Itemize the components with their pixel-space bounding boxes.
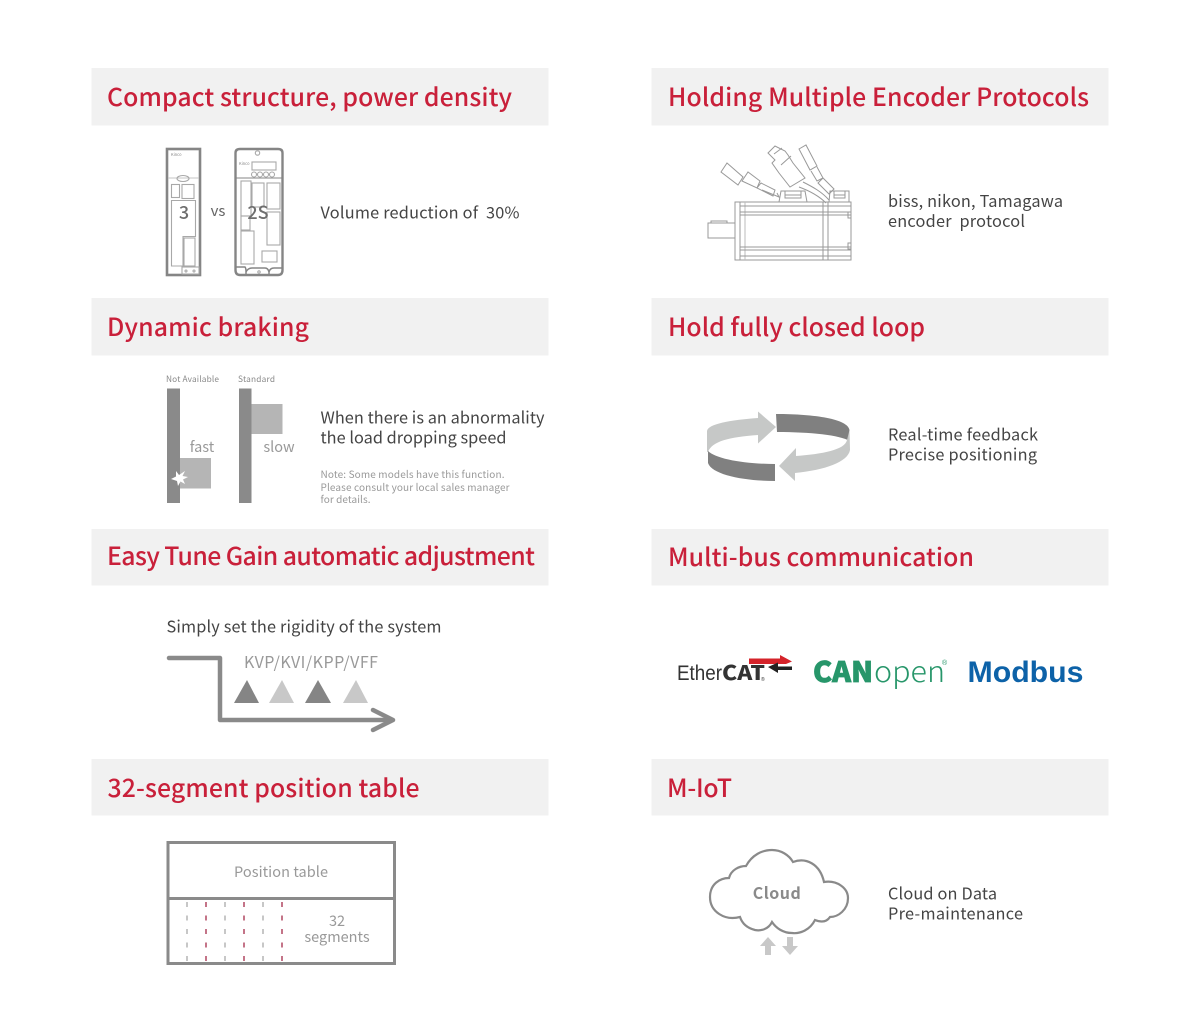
text: note: for details.	[320, 491, 371, 506]
diagram: standard slow	[238, 373, 295, 503]
text: volume reduction: Volume reduction of 30%	[320, 200, 520, 224]
text: abnormality: the load dropping speed	[320, 424, 506, 448]
logo: EtherCAT: Ether	[677, 662, 722, 685]
label: gain parameters: KVP/KVI/KPP/VFF	[244, 649, 378, 673]
heading: M-IoT: M-IoT	[667, 769, 732, 805]
text: note: Please consult your local sales manager	[320, 479, 510, 494]
label: vs: vs	[211, 200, 225, 221]
diagram: standard slow: slow	[263, 436, 295, 457]
logo: CANopen: ®	[942, 659, 948, 667]
heading: fully closed loop	[652, 298, 1108, 356]
heading: multi-bus: Multi-bus communication	[668, 538, 974, 574]
panel: compact structure	[92, 68, 548, 275]
text: feedback: Precise positioning	[888, 442, 1037, 466]
diagram: position table: segments	[304, 926, 370, 947]
logo: EtherCAT: ®	[761, 676, 765, 683]
diagram: position table: Position table	[234, 861, 328, 882]
icon: cloud: Cloud	[753, 880, 801, 904]
heading: dynamic braking: Dynamic braking	[107, 308, 309, 344]
panel: M-IoT	[652, 759, 1108, 955]
text: cloud on data: Pre-maintenance	[888, 900, 1023, 924]
icon: model 3 drive	[167, 149, 200, 275]
text: abnormality: When there is an abnormality	[320, 404, 545, 428]
logo: EtherCAT: CAT	[722, 657, 765, 686]
heading: easy tune: Easy Tune Gain automatic adjustment	[107, 537, 535, 573]
text: rigidity: Simply set the rigidity of the system	[166, 614, 442, 638]
diagram: not available fast: Not Available	[166, 373, 219, 385]
text: note: Note: Some models have this function.	[320, 466, 505, 481]
logo: CANopen: open	[874, 649, 945, 691]
panel: encoder protocols	[652, 68, 1108, 260]
icon: cloud	[710, 850, 848, 933]
icon: model 2S drive: Kinco	[239, 161, 250, 167]
logo: CANopen: CAN	[813, 651, 873, 691]
panel: easy tune	[92, 529, 548, 730]
heading: encoder protocols	[652, 68, 1108, 126]
heading: compact structure: Compact structure, power density	[107, 78, 512, 114]
heading: fully closed loop: Hold fully closed loop	[668, 308, 925, 344]
icon: model 3 drive: 3	[179, 199, 189, 225]
diagram: standard slow: Standard	[238, 373, 275, 385]
logo: CANopen	[813, 649, 948, 691]
heading: M-IoT	[652, 759, 1108, 816]
text: encoder protocol: encoder protocol	[888, 208, 1025, 232]
text: abnormality	[320, 404, 545, 448]
heading: compact structure	[92, 68, 548, 126]
diagram: step arrow	[169, 658, 393, 730]
text: feedback	[888, 422, 1038, 466]
logo: EtherCAT	[677, 655, 792, 686]
text: cloud on data: Cloud on Data	[888, 880, 997, 904]
icon: gain triangles	[234, 680, 368, 703]
icon: model 2S drive	[236, 149, 282, 275]
icon: up and down arrows	[760, 937, 798, 955]
text: encoder protocol: biss, nikon, Tamagawa	[888, 188, 1063, 212]
diagram: not available fast	[166, 373, 219, 503]
panel: position table	[92, 759, 548, 964]
heading: position table	[92, 759, 548, 816]
icon: servo motor	[708, 145, 851, 260]
text: cloud on data	[888, 880, 1023, 924]
text: note	[320, 466, 510, 506]
diagram: position table	[168, 842, 394, 964]
logo: Modbus: Modbus	[968, 656, 1084, 689]
icon: model 2S drive: 2S	[247, 199, 269, 225]
panel: multi-bus	[652, 529, 1108, 691]
panel: fully closed loop	[652, 298, 1108, 481]
heading: dynamic braking	[92, 298, 548, 356]
text: feedback: Real-time feedback	[888, 422, 1038, 446]
heading: multi-bus	[652, 529, 1108, 586]
diagram: not available fast: fast	[190, 436, 215, 457]
heading: encoder protocols: Holding Multiple Encoder Protocols	[668, 78, 1089, 114]
heading: position table: 32-segment position table	[108, 769, 420, 805]
diagram: position table: 32	[329, 910, 345, 931]
panel: dynamic braking	[92, 298, 548, 506]
heading: easy tune	[92, 529, 548, 586]
text: encoder protocol	[888, 188, 1063, 232]
icon: loop arrows	[707, 412, 850, 481]
icon: model 3 drive: Kinco	[171, 152, 182, 158]
